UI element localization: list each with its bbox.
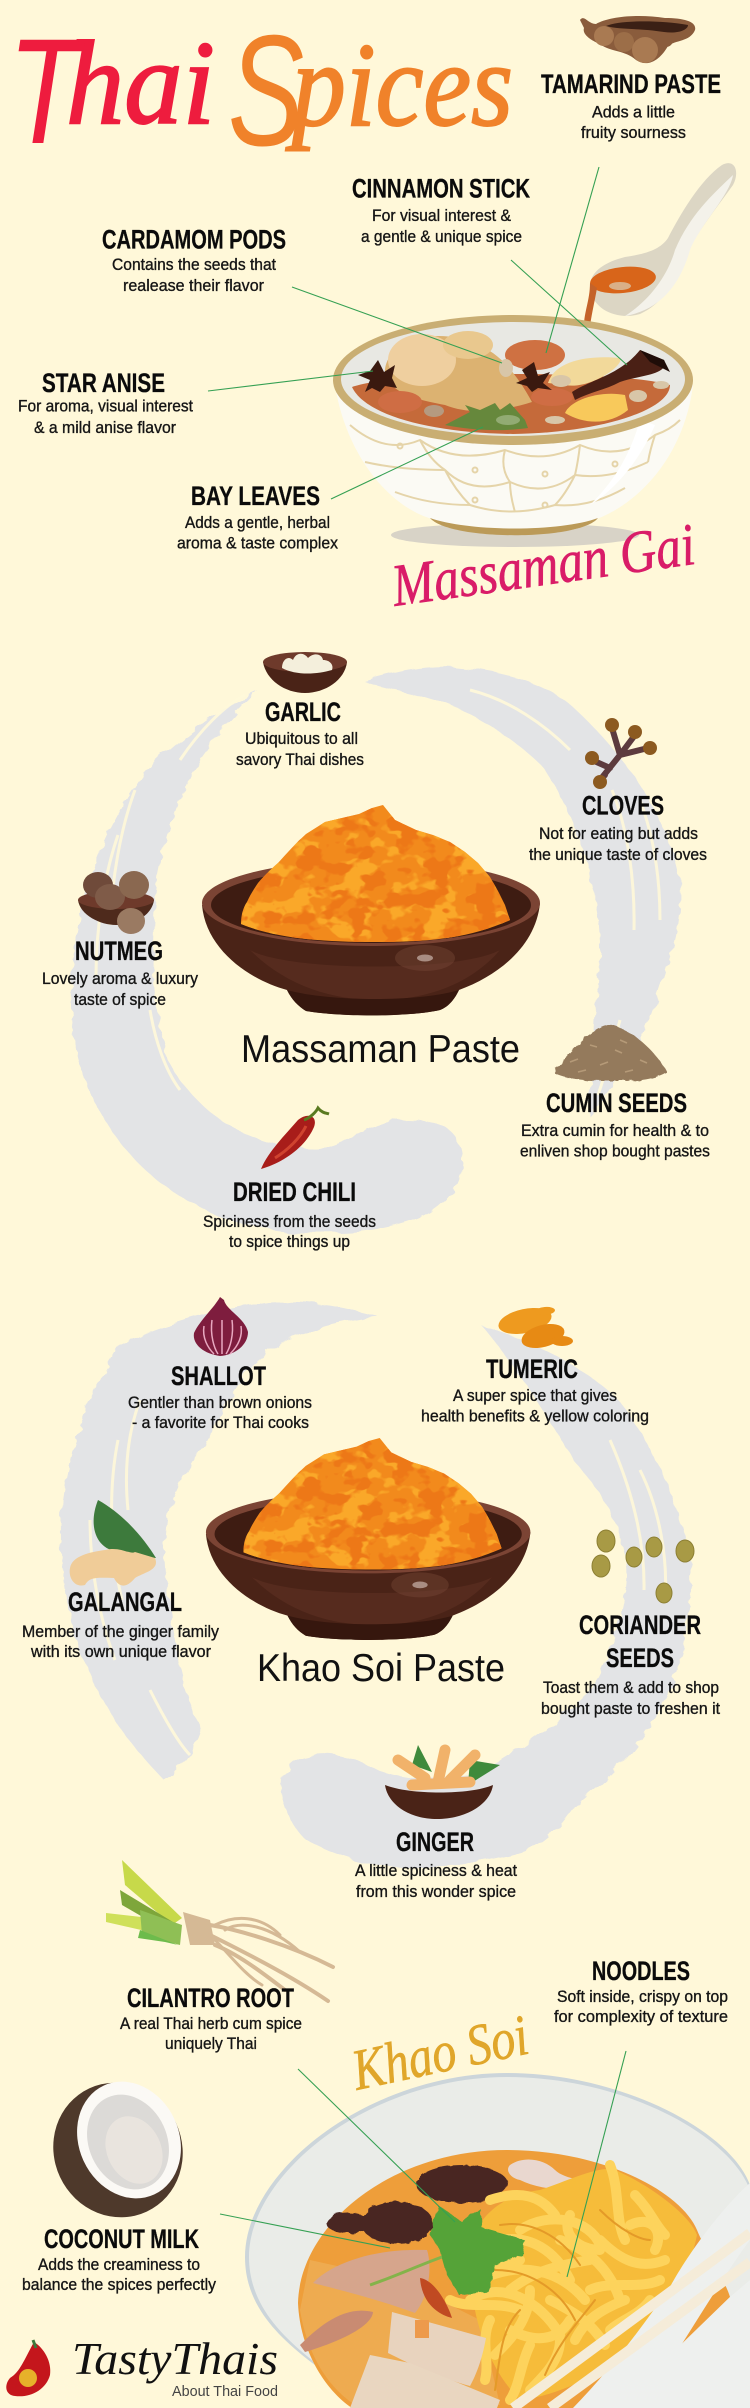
illustration: spoon and chopsticks — [513, 2183, 750, 2408]
callout: bay leaves — [177, 481, 338, 552]
callout: star anise: & a mild anise flavor — [34, 418, 176, 437]
callout: ginger — [355, 1827, 517, 1901]
callout: star anise: STAR ANISE — [42, 368, 165, 398]
callout: coconut milk: Adds the creaminess to — [38, 2255, 200, 2274]
callout: tamarind paste — [541, 16, 721, 142]
illustration: Khao Soi paste bowl — [206, 1433, 530, 1640]
callout: cardamom pods: CARDAMOM PODS — [102, 224, 286, 254]
callout: bay leaves: BAY LEAVES — [191, 481, 320, 511]
illustration: soup bowl — [333, 315, 693, 535]
callout: cumin seeds: CUMIN SEEDS — [546, 1088, 687, 1118]
callout: cilantro root: CILANTRO ROOT — [127, 1983, 294, 2013]
illustration: curry — [298, 2150, 730, 2408]
leader line: tamarind — [546, 167, 599, 353]
icon: dried chili — [261, 1108, 329, 1169]
panel: Massaman Gai soup — [333, 163, 736, 547]
callout: tumeric: TUMERIC — [486, 1354, 578, 1384]
icon: shallot — [194, 1297, 248, 1356]
icon: chili mascot — [6, 2340, 50, 2396]
title: Thai Spices: S — [228, 3, 304, 179]
illustration: fish cakes — [350, 2312, 500, 2408]
callout: cloves: the unique taste of cloves — [529, 845, 707, 864]
callout: tumeric — [421, 1354, 649, 1426]
callout: galangal: with its own unique flavor — [30, 1642, 211, 1661]
leader line: cinnamon — [511, 260, 627, 365]
callout: garlic: GARLIC — [265, 697, 341, 727]
callout: coriander seeds: SEEDS — [606, 1643, 674, 1673]
callout: coriander seeds: Toast them & add to shop — [543, 1678, 719, 1697]
heading: Massaman Paste: Massaman Paste — [241, 1028, 520, 1071]
callout: tamarind paste: fruity sourness — [581, 123, 686, 142]
callout: noodles — [554, 1956, 728, 2026]
callout: bay leaves: aroma & taste complex — [177, 534, 338, 552]
leader line: star anise — [208, 371, 373, 391]
callout: ginger: A little spiciness & heat — [355, 1861, 517, 1880]
icon: cumin seeds — [554, 1025, 667, 1081]
callout: cinnamon stick: CINNAMON STICK — [352, 174, 530, 204]
callout: ginger: from this wonder spice — [356, 1882, 516, 1901]
illustration: cilantro — [370, 2205, 525, 2296]
callout: coriander seeds — [541, 1610, 720, 1718]
illustration: Massaman paste bowl — [202, 800, 540, 1015]
leader line: noodles — [567, 2051, 626, 2277]
title: Thai Spices: pices — [285, 18, 513, 151]
panel: Khao Soi bowl — [245, 2073, 750, 2408]
callout: nutmeg: taste of spice — [74, 990, 166, 1009]
callout: dried chili: Spiciness from the seeds — [203, 1212, 376, 1231]
heading: Khao Soi Paste: Khao Soi Paste — [257, 1647, 505, 1690]
callout: noodles: Soft inside, crispy on top — [557, 1987, 728, 2006]
callout: nutmeg: NUTMEG — [75, 936, 163, 966]
title: Thai Spices: T — [8, 7, 87, 175]
callout: galangal — [22, 1587, 219, 1661]
callout: coriander seeds: CORIANDER — [579, 1610, 701, 1640]
callout: cinnamon stick: For visual interest & — [372, 206, 512, 225]
callout: tumeric: A super spice that gives — [453, 1386, 617, 1405]
panel: Khao Soi Paste wheel — [22, 1297, 720, 1901]
callout: garlic: Ubiquitous to all — [245, 729, 358, 748]
icon: spoon — [580, 163, 736, 345]
callout: dried chili: to spice things up — [229, 1232, 350, 1251]
icon: coriander seeds — [592, 1530, 694, 1603]
callout: bay leaves: Adds a gentle, herbal — [185, 513, 330, 532]
callout: galangal: Member of the ginger family — [22, 1622, 219, 1641]
brush swirl — [71, 667, 680, 1233]
heading: Massaman Gai: Massaman Gai — [387, 511, 699, 619]
callout: cilantro root: uniquely Thai — [165, 2034, 257, 2053]
callout: cumin seeds: Extra cumin for health & to — [521, 1121, 709, 1140]
illustration: dark meat — [326, 2165, 508, 2244]
illustration: sliced pork — [313, 2250, 429, 2313]
icon: tumeric — [496, 1304, 573, 1352]
callout: cardamom pods: realease their flavor — [123, 276, 264, 295]
callout: dried chili — [203, 1177, 376, 1251]
brush swirl — [61, 1302, 690, 1867]
callout: galangal: GALANGAL — [68, 1587, 182, 1617]
icon: cilantro root — [106, 1860, 333, 2001]
icon: tamarind pod — [580, 16, 695, 63]
callout: coriander seeds: bought paste to freshen it — [541, 1699, 720, 1718]
callout: cardamom pods — [102, 224, 286, 295]
icon: galangal — [70, 1500, 156, 1586]
callout: nutmeg: Lovely aroma & luxury — [42, 969, 198, 988]
callout: nutmeg — [42, 936, 198, 1009]
callout: shallot: SHALLOT — [171, 1361, 266, 1391]
icon: bay leaves — [445, 403, 528, 430]
callout: shallot: Gentler than brown onions — [128, 1393, 312, 1412]
callout: cloves: Not for eating but adds — [539, 824, 698, 843]
callout: ginger: GINGER — [396, 1827, 474, 1857]
callout: garlic — [236, 697, 364, 769]
callout: cinnamon stick: a gentle & unique spice — [361, 227, 522, 246]
illustration: white bowl — [245, 2073, 750, 2408]
icon: soup bowl shadow — [391, 523, 639, 547]
callout: tumeric: health benefits & yellow coloring — [421, 1406, 649, 1426]
callout: coconut milk: COCONUT MILK — [44, 2224, 199, 2254]
callout: noodles: for complexity of texture — [554, 2007, 728, 2026]
leader line: bay leaves — [331, 427, 483, 499]
title: Thai Spices: hai — [66, 16, 215, 149]
illustration: shrimp — [420, 2278, 452, 2318]
callout: cardamom pods: Contains the seeds that — [112, 255, 276, 274]
leader line: cardamom — [292, 287, 502, 363]
callout: coconut milk: balance the spices perfectly — [22, 2275, 216, 2294]
leader line: cilantro root — [298, 2069, 455, 2222]
icon: garlic bowl — [263, 652, 347, 693]
callout: cinnamon stick — [352, 174, 530, 246]
icon: nutmeg — [78, 871, 154, 934]
logo: TastyThais: TastyThais — [72, 2333, 278, 2384]
icon: star anise — [358, 360, 397, 392]
callout: cumin seeds — [520, 1088, 710, 1160]
heading: Khao Soi: Khao Soi — [345, 2002, 534, 2103]
callout: shallot — [128, 1361, 312, 1432]
icon: cloves — [585, 718, 657, 789]
callout: coconut milk — [22, 2224, 216, 2294]
callout: garlic: savory Thai dishes — [236, 750, 364, 769]
illustration: squid ring — [508, 2160, 595, 2190]
callout: cilantro root: A real Thai herb cum spice — [120, 2014, 302, 2033]
icon: ginger bowl — [385, 1745, 500, 1819]
callout: cumin seeds: enliven shop bought pastes — [520, 1142, 710, 1160]
title: Thai Spices — [8, 3, 513, 179]
panel: Massaman Paste wheel — [42, 652, 710, 1251]
icon: coconut — [31, 2061, 205, 2239]
callout: star anise: For aroma, visual interest — [18, 396, 193, 416]
callout: noodles: NOODLES — [592, 1956, 690, 1986]
callout: tamarind paste: Adds a little — [592, 102, 675, 122]
callout: dried chili: DRIED CHILI — [233, 1177, 356, 1207]
callout: cloves: CLOVES — [582, 790, 664, 820]
leader line: coconut milk — [220, 2214, 390, 2248]
logo: TastyThais: About Thai Food — [172, 2383, 278, 2400]
callout: shallot: - a favorite for Thai cooks — [132, 1413, 309, 1432]
callout: star anise — [18, 368, 193, 437]
illustration: noodles — [450, 2165, 697, 2400]
callout: cilantro root — [120, 1983, 302, 2053]
callout: cloves — [529, 790, 707, 864]
logo: TastyThais — [6, 2333, 278, 2400]
